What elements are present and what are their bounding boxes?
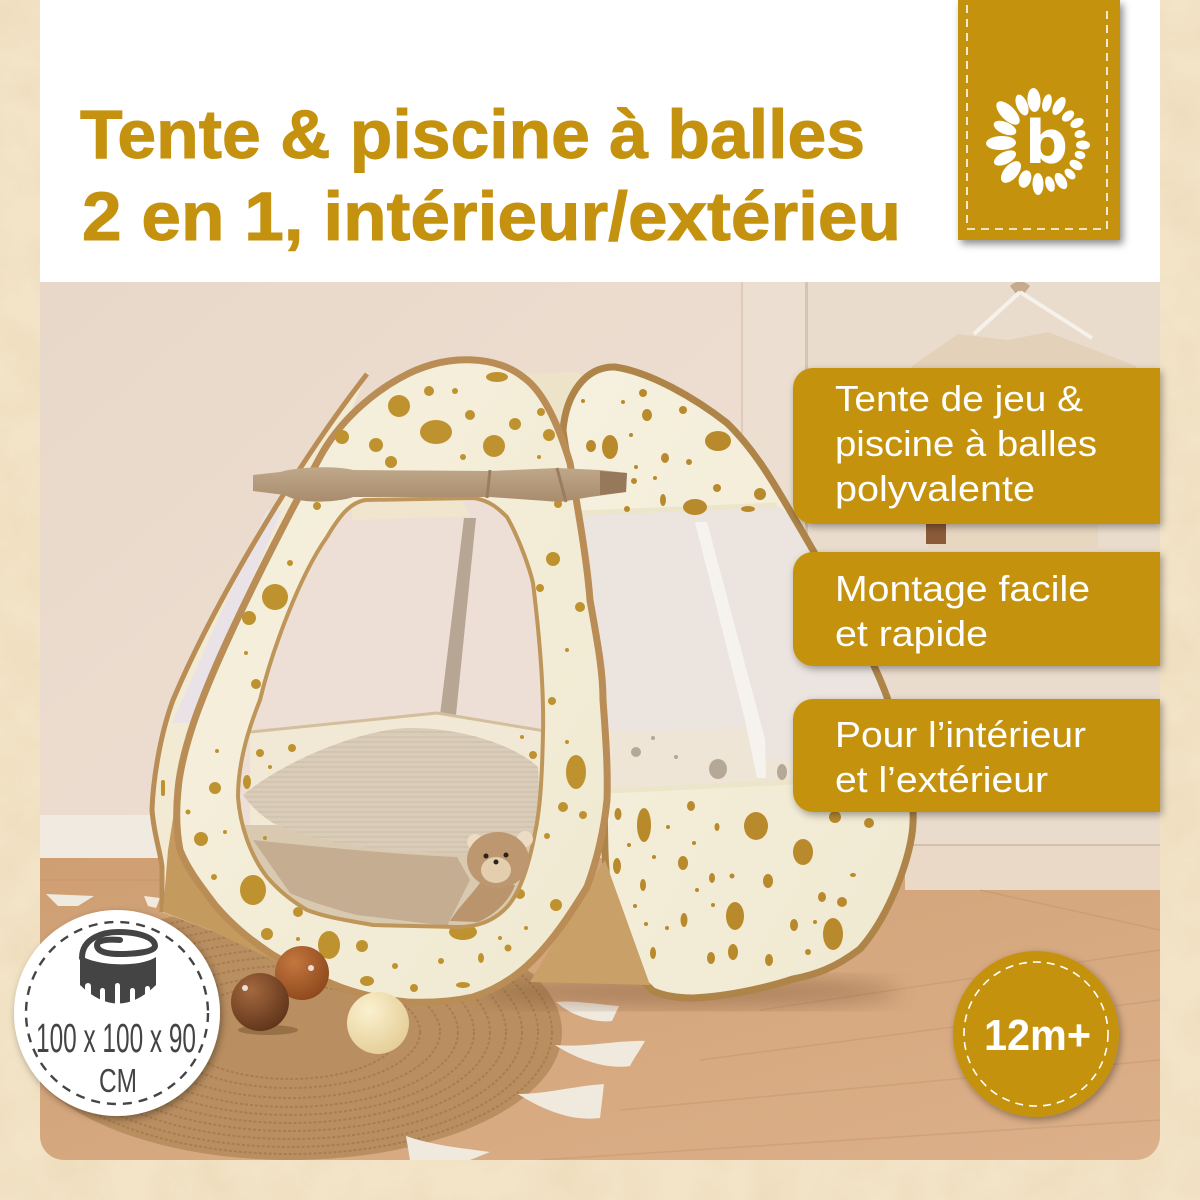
brand label tag with logo	[958, 0, 1120, 240]
mesh window	[582, 505, 893, 791]
icon: sunflower logo: b	[1025, 108, 1068, 178]
rolled tent bar	[253, 467, 627, 502]
lower pillow	[253, 840, 470, 926]
hanging clothes	[912, 282, 1136, 548]
feature box: playtent and ball pit: piscine à balles	[835, 423, 1097, 464]
feature box: playtent and ball pit: polyvalente	[835, 468, 1035, 509]
feature box: easy assembly: Montage facile	[835, 568, 1090, 609]
rug tassels	[46, 894, 645, 1160]
teddy bear	[450, 831, 533, 922]
tent door opening with interior	[230, 490, 550, 940]
right panel outline	[563, 367, 913, 998]
icon: sunflower logo	[986, 88, 1090, 195]
product photo scene	[18, 282, 1160, 1160]
wardrobe	[741, 282, 1160, 892]
upper pillow	[243, 728, 539, 853]
dimensions text: CM	[99, 1062, 137, 1099]
white title header band	[40, 0, 1160, 282]
coloured play balls	[231, 946, 409, 1054]
title: 2 en 1, intérieur/extérieu	[82, 178, 901, 255]
feature box: indoor and outdoor: Pour l’intérieur	[835, 714, 1086, 755]
baseboard	[40, 815, 170, 858]
right tent panel	[563, 367, 913, 998]
feature box: easy assembly	[793, 552, 1160, 666]
right panel polka dots	[581, 389, 874, 966]
front tent panel	[177, 360, 607, 1002]
front panel polka dots	[186, 372, 587, 992]
feature box: easy assembly: et rapide	[835, 613, 988, 654]
feature box: playtent and ball pit: Tente de jeu &	[835, 378, 1083, 419]
age badge 12m+: 12m+	[984, 1011, 1091, 1060]
feature box: indoor and outdoor: et l’extérieur	[835, 759, 1048, 800]
wall	[40, 282, 750, 882]
wood floor	[40, 858, 1160, 1160]
feature box: indoor and outdoor	[793, 699, 1160, 812]
back top strip	[520, 372, 590, 420]
feature box: playtent and ball pit	[793, 368, 1160, 524]
dimensions badge	[14, 910, 220, 1116]
left side mesh panel	[152, 374, 367, 992]
age badge 12m+	[953, 951, 1119, 1117]
tent base fabric	[530, 860, 650, 985]
title	[80, 96, 901, 255]
jute rug	[18, 904, 562, 1160]
tent	[152, 360, 913, 1002]
icon: measuring tape roll	[80, 932, 156, 1023]
dimensions text: 100 x 100 x 90	[36, 1015, 196, 1061]
title: Tente & piscine à balles	[80, 96, 865, 173]
floor shadow under tent	[480, 976, 900, 1008]
dimensions text	[36, 1015, 196, 1099]
